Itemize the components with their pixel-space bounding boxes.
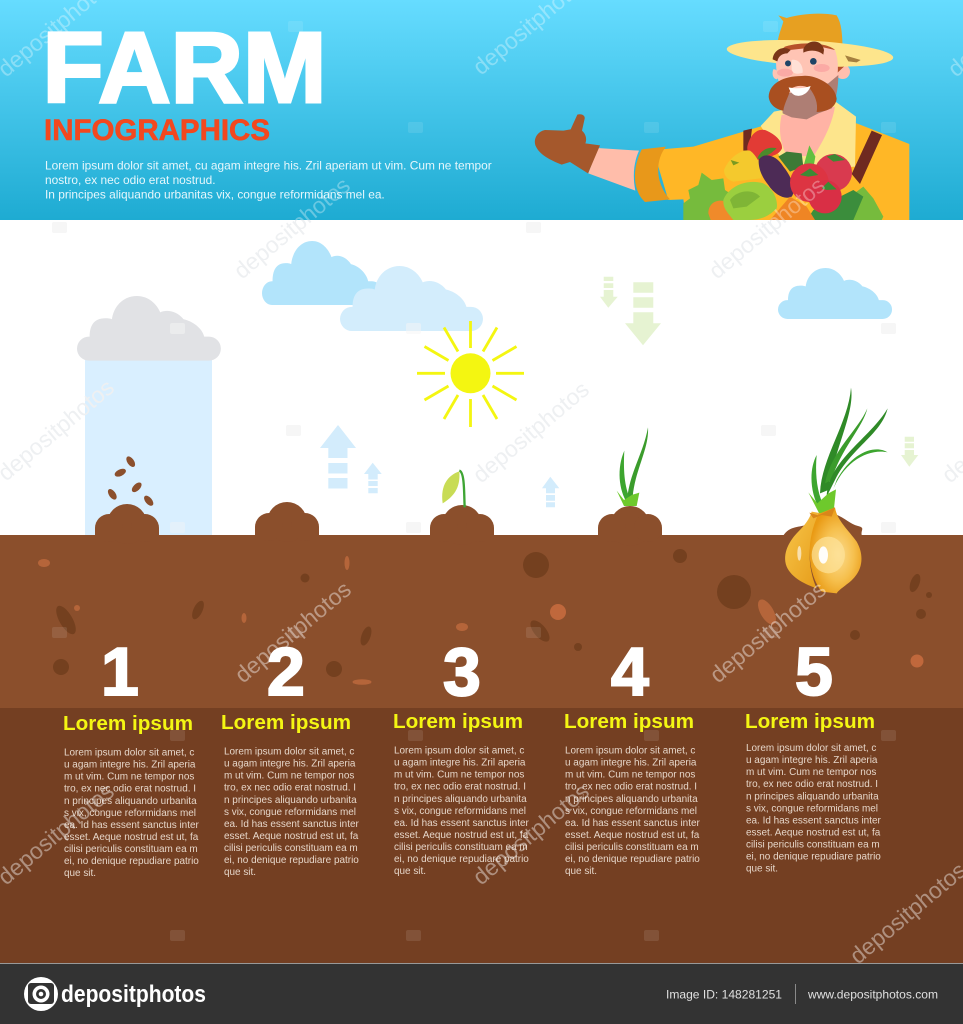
footer bar bbox=[0, 964, 963, 1024]
eggplant bbox=[759, 155, 794, 198]
mound 1 bbox=[95, 504, 159, 544]
step 4 text: ei, no denique repudiare patrio bbox=[565, 854, 700, 865]
small down arrow bbox=[600, 277, 618, 308]
footer image id: Image ID: 148281251 bbox=[666, 988, 782, 1002]
soil upper layer bbox=[0, 535, 963, 708]
step 1 text: tro, ex nec odio erat nostrud. I bbox=[64, 784, 196, 795]
glove bbox=[535, 114, 600, 173]
number 5: 5 bbox=[795, 634, 833, 710]
icons: up arrows bbox=[320, 425, 559, 507]
collar bbox=[761, 100, 856, 170]
step numbers bbox=[101, 634, 833, 710]
number 2: 2 bbox=[267, 634, 305, 710]
watermarks: depositphotos bbox=[704, 172, 830, 284]
eyebrows bbox=[773, 48, 791, 61]
step 1 text: n principes aliquando urbanita bbox=[64, 796, 197, 807]
cloud: blue right bbox=[778, 268, 892, 319]
red pepper bbox=[747, 130, 782, 160]
step 3 text: esset. Aeque nostrud est ut, fa bbox=[394, 830, 529, 841]
step 4 text: tro, ex nec odio erat nostrud. I bbox=[565, 782, 697, 793]
step 2 text: u agam integre his. Zril aperia bbox=[224, 759, 356, 770]
forearm bbox=[588, 148, 639, 191]
step 1 text: Lorem ipsum dolor sit amet, c bbox=[64, 748, 194, 758]
footer divider bbox=[795, 984, 796, 1004]
step 2 text: Lorem ipsum dolor sit amet, c bbox=[224, 746, 354, 758]
third up arrow bbox=[542, 477, 559, 507]
step 2 text: s vix, congue reformidans mel bbox=[224, 807, 356, 818]
step 1 text: ei, no denique repudiare patrio bbox=[64, 856, 199, 867]
soil mounds bbox=[95, 502, 862, 546]
tomatoes bbox=[815, 154, 852, 191]
onion: stage 5 bbox=[785, 388, 888, 593]
step 4 text: esset. Aeque nostrud est ut, fa bbox=[565, 830, 700, 841]
cloud: blue left bbox=[262, 241, 382, 305]
step 2 text: n principes aliquando urbanita bbox=[224, 795, 357, 806]
step 4 text: m ut vim. Cum ne tempor nos bbox=[565, 770, 695, 781]
step 5 text: ea. Id has essent sanctus inter bbox=[746, 815, 881, 826]
hat brim bbox=[726, 36, 894, 70]
soil lower layer bbox=[0, 708, 963, 963]
step 5 text: cilisi periculis constituam ea m bbox=[746, 840, 880, 851]
step 5 text: n principes aliquando urbanita bbox=[746, 791, 879, 802]
step 1 text: s vix, congue reformidans mel bbox=[64, 808, 196, 819]
dark leaves bbox=[778, 152, 803, 172]
step 3 text: cilisi periculis constituam ea m bbox=[394, 842, 528, 853]
sprout: stage 4 bbox=[617, 427, 648, 506]
right down arrow bbox=[901, 437, 918, 467]
step 2 bbox=[221, 712, 359, 878]
step 5 heading: Lorem ipsum bbox=[745, 711, 875, 733]
step 2 text: ei, no denique repudiare patrio bbox=[224, 855, 359, 866]
step 2 text: cilisi periculis constituam ea m bbox=[224, 843, 358, 854]
step 3 heading: Lorem ipsum bbox=[393, 711, 523, 733]
icons: down arrows bbox=[600, 277, 918, 467]
subtitle: INFOGRAPHICS: INFOGRAPHICS bbox=[44, 114, 270, 147]
step 4 text: cilisi periculis constituam ea m bbox=[565, 842, 699, 853]
step 3 text: ei, no denique repudiare patrio bbox=[394, 854, 529, 865]
step 3 text: n principes aliquando urbanita bbox=[394, 794, 527, 805]
number 1: 1 bbox=[101, 634, 139, 710]
mound 3 bbox=[430, 505, 494, 545]
step 1 text: m ut vim. Cum ne tempor nos bbox=[64, 772, 194, 783]
step 3 text: s vix, congue reformidans mel bbox=[394, 806, 526, 817]
suspenders bbox=[743, 129, 752, 151]
step 3 text: tro, ex nec odio erat nostrud. I bbox=[394, 782, 526, 793]
watermarks: depositphotos bbox=[468, 376, 594, 488]
step 2 heading: Lorem ipsum bbox=[221, 712, 351, 734]
watermarks: depositphotos bbox=[230, 576, 356, 688]
rain cloud: grey bbox=[77, 296, 221, 361]
eyes bbox=[785, 60, 791, 66]
header banner bbox=[0, 0, 963, 220]
onion leaves bbox=[811, 388, 888, 510]
sprout: stage 3 bbox=[442, 471, 465, 507]
ear and hair bbox=[835, 64, 850, 79]
hair band under brim bbox=[783, 43, 835, 50]
step 4 text: ea. Id has essent sanctus inter bbox=[565, 818, 700, 829]
clouds bbox=[262, 241, 892, 331]
step 5 text: s vix, congue reformidans mel bbox=[746, 803, 878, 814]
watermark camera marks bbox=[52, 21, 896, 941]
title: FARM: FARM bbox=[42, 12, 326, 124]
step 4 text: s vix, congue reformidans mel bbox=[565, 806, 697, 817]
yellow pepper bbox=[724, 150, 761, 182]
step 1 bbox=[63, 713, 199, 879]
step 2 text: que sit. bbox=[224, 867, 256, 878]
step 2 text: tro, ex nec odio erat nostrud. I bbox=[224, 783, 356, 794]
step 1 heading: Lorem ipsum bbox=[63, 713, 193, 735]
onion bulb right bbox=[810, 507, 861, 593]
step 3 text: ea. Id has essent sanctus inter bbox=[394, 818, 529, 829]
step 3 text: u agam integre his. Zril aperia bbox=[394, 758, 526, 769]
step 4 text: u agam integre his. Zril aperia bbox=[565, 758, 697, 769]
moustache bbox=[769, 76, 837, 112]
onion bulb left bbox=[785, 512, 822, 588]
step 1 text: ea. Id has essent sanctus inter bbox=[64, 820, 199, 831]
header intro text: nostro, ex nec odio erat nostrud. bbox=[45, 173, 216, 187]
lettuce right bbox=[840, 187, 883, 220]
mound 2 bbox=[255, 502, 319, 542]
carrots bbox=[708, 201, 737, 220]
step 2 text: ea. Id has essent sanctus inter bbox=[224, 819, 359, 830]
step 5 text: ei, no denique repudiare patrio bbox=[746, 852, 881, 863]
step 5 text: que sit. bbox=[746, 864, 778, 875]
step 5 text: u agam integre his. Zril aperia bbox=[746, 755, 878, 766]
face bbox=[776, 43, 838, 93]
watermarks: depositphotos bbox=[468, 778, 594, 890]
step 2 text: esset. Aeque nostrud est ut, fa bbox=[224, 831, 359, 842]
rain column bbox=[85, 360, 212, 536]
cloud: pale centre bbox=[340, 266, 483, 331]
small up arrow bbox=[364, 463, 382, 493]
step 1 text: esset. Aeque nostrud est ut, fa bbox=[64, 832, 199, 843]
step 5 bbox=[745, 711, 881, 875]
step 2 text: m ut vim. Cum ne tempor nos bbox=[224, 771, 354, 782]
soil specks bbox=[38, 549, 932, 685]
beard bbox=[782, 75, 838, 119]
watermarks: depositphotos bbox=[229, 172, 355, 284]
step 5 text: tro, ex nec odio erat nostrud. I bbox=[746, 779, 878, 790]
step 4 text: Lorem ipsum dolor sit amet, c bbox=[565, 746, 695, 756]
watermarks: depositphotos bbox=[229, 172, 355, 284]
step 4 text: n principes aliquando urbanita bbox=[565, 794, 698, 805]
step 5 text: esset. Aeque nostrud est ut, fa bbox=[746, 827, 881, 838]
mound 5 bbox=[783, 513, 862, 536]
step 4 heading: Lorem ipsum bbox=[564, 711, 694, 733]
hat crown bbox=[777, 14, 843, 47]
footer url: www.depositphotos.com bbox=[807, 988, 938, 1002]
farmer shirt bbox=[653, 123, 909, 220]
rolled sleeve cuff bbox=[635, 147, 670, 202]
mouth bbox=[789, 86, 811, 96]
number 4: 4 bbox=[611, 634, 649, 710]
step 5 text: m ut vim. Cum ne tempor nos bbox=[746, 767, 876, 778]
neck bbox=[780, 107, 835, 157]
step 3 bbox=[393, 711, 529, 877]
footer logo bbox=[24, 977, 206, 1011]
illustration: farmer holding vegetables bbox=[535, 14, 909, 220]
header intro text: In principes aliquando urbanitas vix, congue reformidans mel ea. bbox=[45, 188, 385, 202]
step 4 bbox=[564, 711, 700, 877]
lettuce left bbox=[683, 173, 740, 220]
watermarks: depositphotos bbox=[705, 576, 831, 688]
step 3 text: m ut vim. Cum ne tempor nos bbox=[394, 770, 524, 781]
onion highlight bbox=[812, 537, 845, 573]
cabbage bbox=[723, 182, 777, 220]
step 3 text: Lorem ipsum dolor sit amet, c bbox=[394, 746, 524, 756]
step 1 text: que sit. bbox=[64, 868, 96, 879]
big down arrow bbox=[625, 282, 661, 345]
number 3: 3 bbox=[443, 634, 481, 710]
step 3 text: que sit. bbox=[394, 866, 426, 877]
watermarks: depositphotos bbox=[704, 172, 830, 284]
icon: camera logo bbox=[24, 977, 58, 1011]
step 4 text: que sit. bbox=[565, 866, 597, 877]
step 1 text: u agam integre his. Zril aperia bbox=[64, 760, 196, 771]
logo wordmark: depositphotos bbox=[61, 981, 206, 1008]
step 1 text: cilisi periculis constituam ea m bbox=[64, 844, 198, 855]
big up arrow bbox=[320, 425, 356, 488]
mound 4 bbox=[598, 506, 662, 546]
icon: seeds bbox=[106, 455, 155, 507]
step 5 text: Lorem ipsum dolor sit amet, c bbox=[746, 743, 876, 754]
header intro text: Lorem ipsum dolor sit amet, cu agam integre his. Zril aperiam ut vim. Cum ne tempor bbox=[45, 158, 492, 172]
icon: sun bbox=[417, 321, 524, 427]
